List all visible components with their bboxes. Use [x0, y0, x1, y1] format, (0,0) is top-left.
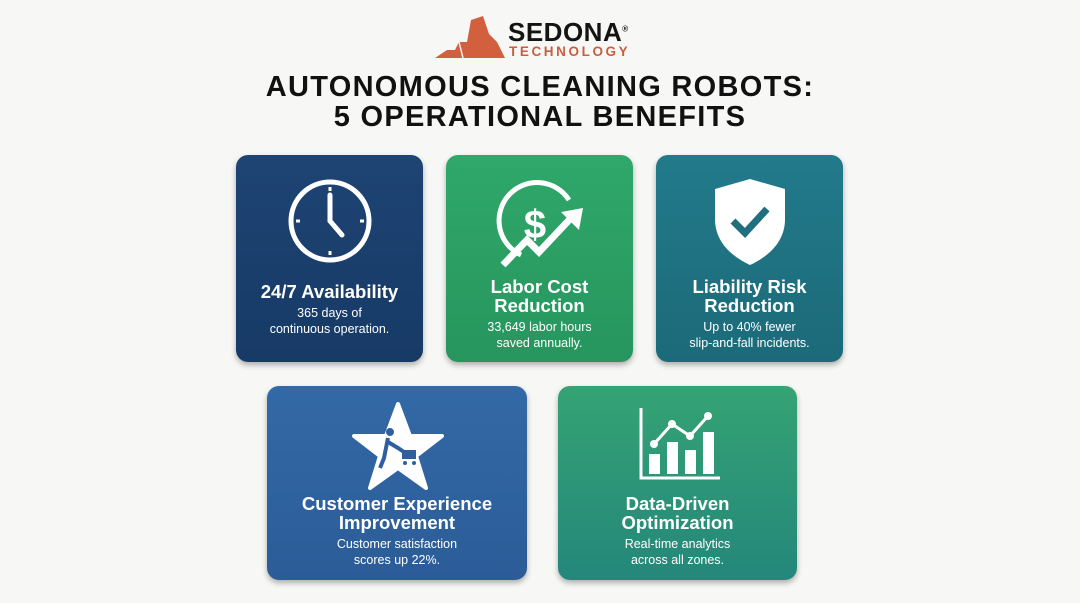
heading: Reduction	[704, 295, 795, 316]
panel: customer experience	[267, 386, 527, 580]
text	[625, 537, 730, 567]
heading: Liability Risk	[692, 276, 807, 297]
logo	[435, 16, 630, 59]
heading: 24/7 Availability	[261, 281, 398, 302]
text	[487, 320, 592, 350]
icon: star with shopper	[352, 402, 444, 490]
heading	[692, 276, 807, 316]
panel: liability	[656, 155, 843, 362]
icon: dollar arrow	[496, 180, 583, 268]
icon: clock	[288, 180, 372, 262]
heading: Reduction	[494, 295, 585, 316]
text: scores up 22%.	[354, 553, 440, 567]
text	[270, 306, 389, 336]
heading	[491, 276, 588, 316]
text: slip-and-fall incidents.	[689, 336, 810, 350]
panel: data-driven	[558, 386, 797, 580]
text: Up to 40% fewer	[703, 320, 796, 334]
heading: Improvement	[339, 512, 455, 533]
icon: logo mountain	[435, 16, 505, 58]
icon: chart	[640, 408, 720, 480]
text: across all zones.	[631, 553, 724, 567]
heading: Customer Experience	[302, 493, 492, 514]
logo text: SEDONA®	[508, 17, 629, 47]
icon: shield check	[715, 179, 785, 265]
text: Customer satisfaction	[337, 537, 457, 551]
heading	[302, 493, 492, 533]
text	[337, 537, 457, 567]
text: continuous operation.	[270, 322, 389, 336]
text: Real-time analytics	[625, 537, 730, 551]
logo: TECHNOLOGY	[509, 44, 630, 59]
panel: 24/7 availability	[236, 155, 423, 362]
heading: Labor Cost	[491, 276, 588, 297]
title	[266, 71, 814, 133]
icon: dollar arrow: $	[524, 203, 546, 247]
panel: labor cost	[446, 155, 633, 362]
heading	[621, 493, 734, 533]
title: AUTONOMOUS CLEANING ROBOTS:	[266, 71, 814, 103]
text: 365 days of	[297, 306, 362, 320]
title: 5 OPERATIONAL BENEFITS	[334, 101, 746, 133]
heading: Optimization	[621, 512, 734, 533]
text	[689, 320, 810, 350]
text: saved annually.	[497, 336, 582, 350]
heading: Data-Driven	[626, 493, 729, 514]
text: 33,649 labor hours	[487, 320, 592, 334]
